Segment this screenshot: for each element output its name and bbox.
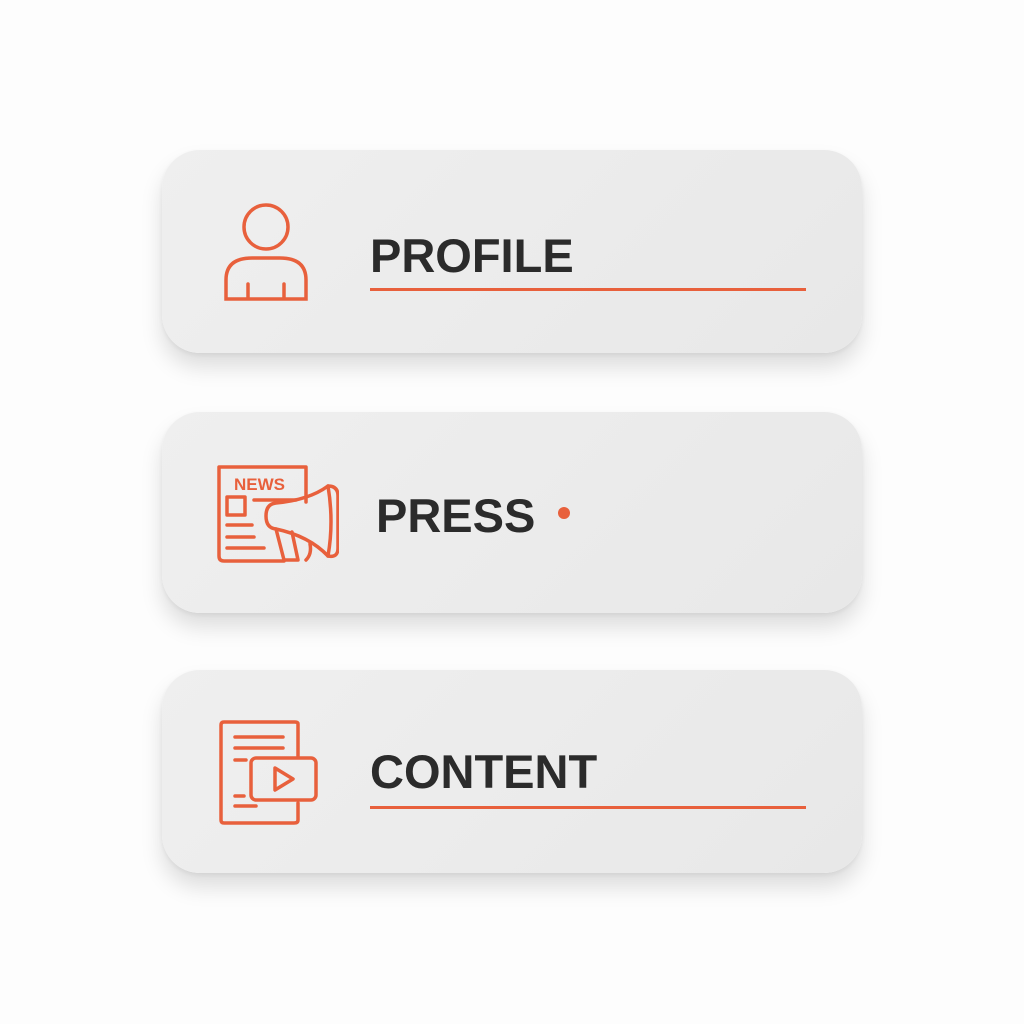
dot [558,507,570,519]
panel: content [162,670,862,873]
underline [370,288,806,291]
underline [370,806,806,809]
heading: PROFILE: PROFILE [370,229,574,282]
icon: document video [219,720,318,825]
panel: press [162,412,862,613]
icon: news megaphone [217,465,339,563]
heading: PRESS: PRESS [376,489,535,542]
icon: person [224,203,308,301]
panel: profile [162,150,862,353]
icon: news megaphone: NEWS [234,475,285,494]
heading: CONTENT: CONTENT [370,745,597,798]
